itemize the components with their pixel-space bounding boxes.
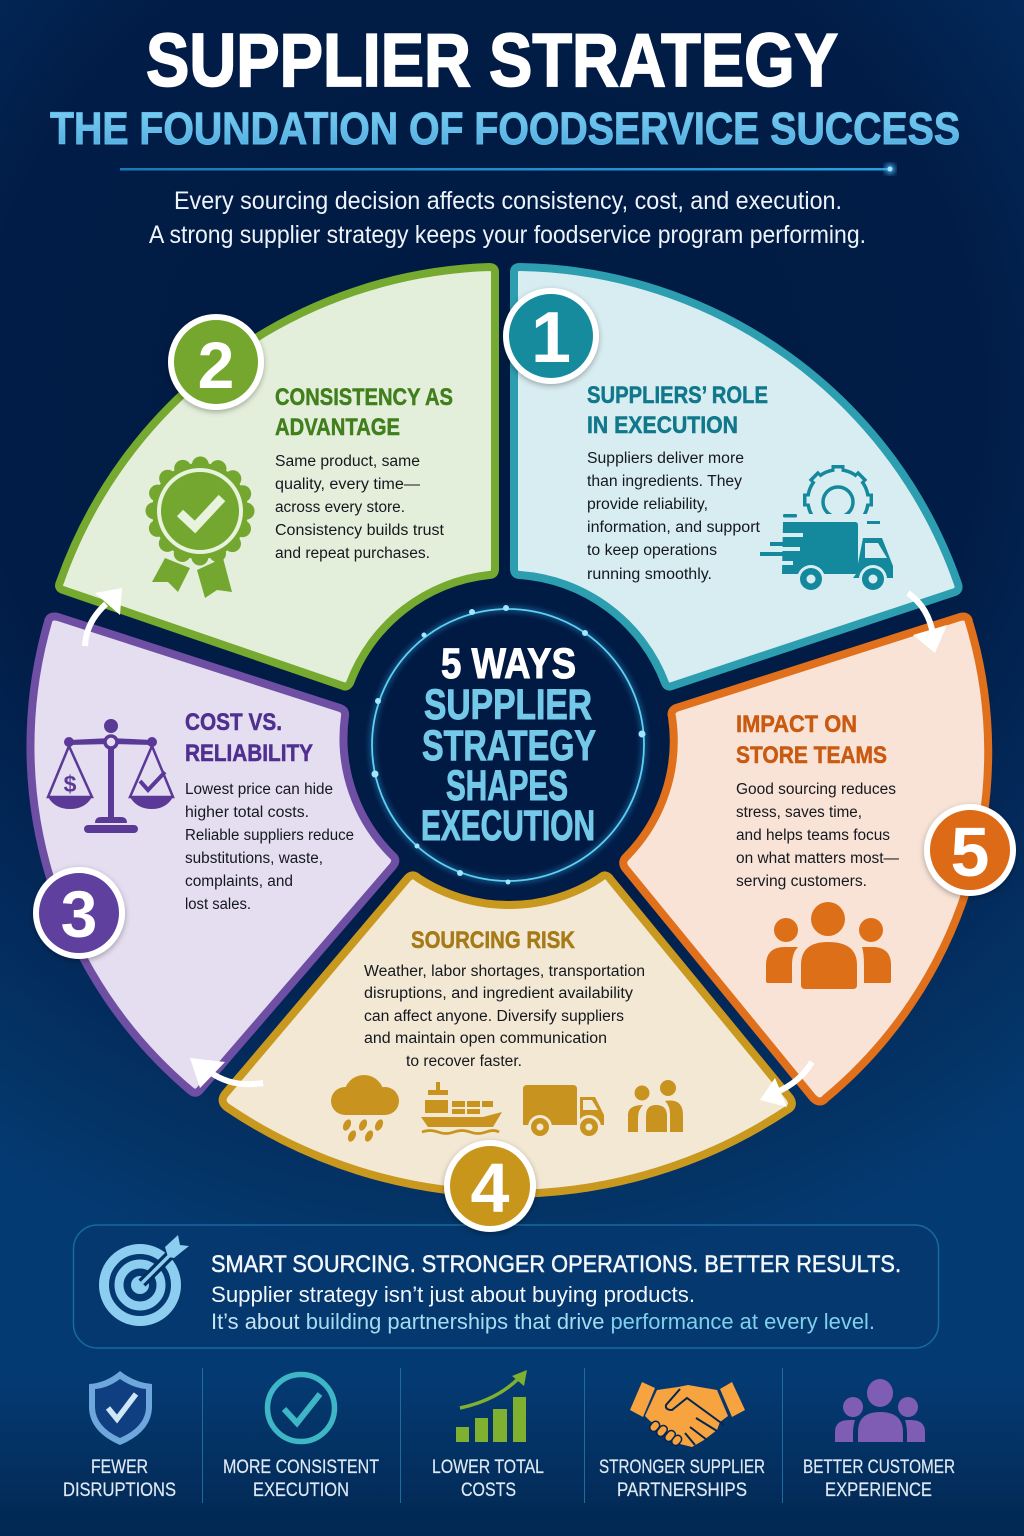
body text: and maintain open communication [364,1030,607,1047]
body text: serving customers. [736,873,867,890]
body text: than ingredients. They [587,473,742,490]
benefit: stronger supplier partnerships: STRONGER SUPPLIER [599,1457,765,1478]
body text: Good sourcing reduces [736,781,896,798]
badge 4: 4 [471,1149,510,1227]
body text: quality, every time— [275,476,421,493]
badge 1 [506,291,596,381]
title divider line [120,164,895,174]
badge 4 [447,1143,533,1229]
icon: rain cloud [331,1075,399,1143]
body text: Lowest price can hide [185,781,333,798]
callout banner [74,1225,938,1348]
body text: across every store. [275,499,405,516]
body text [736,781,899,890]
gear [783,465,886,538]
body text: stress, saves time, [736,804,862,821]
icon: gear and delivery truck [760,465,893,593]
panel 2: consistency as advantage [59,267,495,687]
body text: substitutions, waste, [185,850,323,867]
arrows: clockwise flow between segments [85,588,947,1107]
panel 1: suppliers' role in execution [506,267,959,687]
arrow: 3 to 2 [85,588,122,646]
benefit: fewer disruptions: DISRUPTIONS [63,1480,176,1501]
benefit: fewer disruptions [63,1371,176,1501]
badge 2 [171,317,261,407]
hub text: EXECUTION [421,802,595,850]
badge 3 [36,870,122,956]
panel 5: impact on store teams [623,617,1013,1102]
arrow: 1 to 5 [908,593,947,653]
heading: CONSISTENCY AS [275,384,453,411]
heading: SUPPLIERS’ ROLE [587,382,768,409]
body text: information, and support [587,519,761,536]
icon: target with arrow [104,1235,189,1321]
body text: running smoothly. [587,566,712,583]
badge 5 [927,807,1013,893]
body text: Same product, same [275,453,420,470]
body text: Reliable suppliers reduce [185,827,354,844]
icon: balance scale [48,719,173,833]
panel 4: sourcing risk [223,875,792,1229]
benefit: more consistent execution: EXECUTION [253,1480,349,1501]
benefit: more consistent execution: MORE CONSISTENT [223,1457,379,1478]
body text: provide reliability, [587,496,708,513]
benefit: better customer experience: BETTER CUSTOMER [803,1457,955,1478]
heading: ADVANTAGE [275,414,400,441]
benefit: fewer disruptions: FEWER [91,1457,148,1478]
body text: on what matters most— [736,850,899,867]
body text [587,450,761,583]
hub text: SUPPLIER [424,681,592,729]
badge 5: 5 [951,813,989,891]
heading [736,711,887,769]
benefit: stronger supplier partnerships [599,1382,765,1501]
body text [275,453,445,562]
body text: Suppliers deliver more [587,450,744,467]
hub text [421,640,596,850]
benefit: stronger supplier partnerships: PARTNERSHIPS [617,1480,747,1501]
benefits row [63,1368,955,1503]
body text: complaints, and [185,873,293,890]
body text: lost sales. [185,896,251,913]
heading [587,382,768,439]
hub text: SHAPES [446,762,568,810]
heading [275,384,453,441]
glowing ring [372,605,646,884]
body text: Consistency builds trust [275,522,445,539]
badge 3: 3 [61,877,97,951]
panel 3: cost vs reliability [30,617,395,1093]
icon: balance scale: $ [64,771,77,797]
callout line 1: Supplier strategy isn’t just about buying products. [211,1282,695,1307]
body text: to keep operations [587,542,717,559]
badge 2: 2 [198,328,234,402]
intro text [149,187,866,249]
body text [185,781,354,913]
truck [760,522,893,593]
center hub [372,605,646,884]
heading: STORE TEAMS [736,742,887,769]
heading: COST VS. [185,709,282,736]
body text: and repeat purchases. [275,545,430,562]
arrow: 4 to 3 [190,1058,263,1088]
body text: to recover faster. [406,1053,522,1070]
intro text: Every sourcing decision affects consistency, cost, and execution. [174,187,842,215]
intro text: A strong supplier strategy keeps your foodservice program performing. [149,221,866,249]
body text: higher total costs. [185,804,309,821]
hub text: 5 WAYS [441,640,576,688]
benefit: lower total costs [432,1370,544,1501]
icon: rosette with check [152,463,248,598]
callout heading: SMART SOURCING. STRONGER OPERATIONS. BETTER RESULTS. [211,1251,901,1278]
body text: Weather, labor shortages, transportation [364,963,645,980]
heading: RELIABILITY [185,740,313,767]
body text: can affect anyone. Diversify suppliers [364,1008,624,1025]
benefit: more consistent execution [223,1374,379,1501]
badge 1: 1 [531,298,571,378]
icon: cargo ship [421,1082,502,1134]
body text [364,963,645,1070]
benefit: lower total costs: LOWER TOTAL [432,1457,544,1478]
body text: disruptions, and ingredient availability [364,985,633,1002]
icon: delivery truck [523,1085,604,1139]
callout line 2: It’s about building partnerships that drive performance at every level. [211,1309,875,1334]
dividers [202,1368,783,1503]
hub text: STRATEGY [422,722,596,770]
benefit: lower total costs: COSTS [461,1480,516,1501]
icon: group of workers [628,1080,683,1132]
heading: SOURCING RISK [411,927,575,954]
benefit: better customer experience [803,1379,955,1501]
arrow: 5 to 4 [760,1062,812,1107]
title: SUPPLIER STRATEGY [146,18,838,102]
benefit: better customer experience: EXPERIENCE [825,1480,932,1501]
body text: and helps teams focus [736,827,890,844]
heading: IMPACT ON [736,711,857,738]
heading [185,709,313,767]
icon: team of people [766,902,891,989]
heading: IN EXECUTION [587,412,738,439]
